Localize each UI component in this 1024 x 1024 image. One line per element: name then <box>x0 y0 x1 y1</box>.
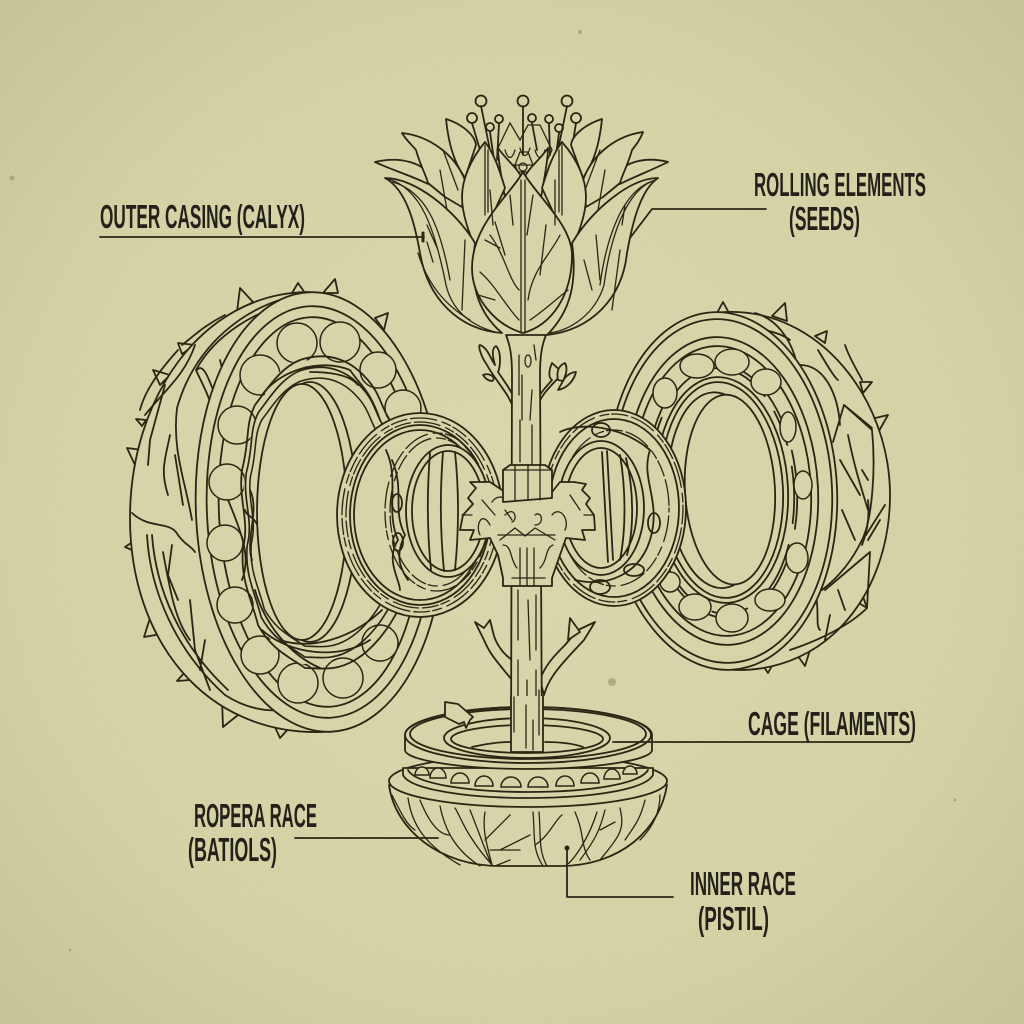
right ring back body <box>655 312 890 670</box>
upper branches <box>479 345 576 408</box>
left ring thorns <box>125 279 388 738</box>
stamens <box>467 96 581 160</box>
broken fragment <box>445 702 473 728</box>
left small bearing ring <box>337 413 503 617</box>
lower branches <box>475 618 595 695</box>
bowl veins <box>392 795 660 866</box>
left ring vine band <box>228 356 398 669</box>
right small ring details <box>545 414 683 602</box>
bowl <box>389 785 667 866</box>
left small ring body <box>337 413 503 617</box>
label: ropera race: (BATIOLS) <box>188 831 277 868</box>
label: ropera race <box>188 797 438 868</box>
label: ropera race: ROPERA RACE <box>194 797 317 834</box>
left ring rolling element balls <box>207 322 421 703</box>
cage ring lines <box>405 707 651 763</box>
gear body <box>460 482 595 586</box>
right ring rolling element balls <box>653 349 812 632</box>
right ring leaf veins <box>755 313 885 650</box>
label: outer casing: OUTER CASING (CALYX) <box>100 198 305 235</box>
stem shaft <box>506 335 546 752</box>
hexagonal collar <box>503 465 552 502</box>
caged ball row <box>415 766 637 787</box>
leader line: rolling elements <box>630 209 766 238</box>
left ring central opening <box>257 382 357 642</box>
lower race band <box>403 768 653 798</box>
left ring leaf veins <box>132 295 300 710</box>
outer petals <box>385 178 658 335</box>
flower crown <box>497 123 552 172</box>
stem grain in ring <box>514 690 539 750</box>
right ring thorns <box>717 302 888 673</box>
left small ring details <box>342 418 498 612</box>
left outer bearing ring <box>125 279 455 738</box>
label: inner race: INNER RACE <box>690 865 796 902</box>
gear surface lumps <box>462 495 594 585</box>
middle petals <box>462 142 586 247</box>
petal veins <box>388 145 655 333</box>
cage top ring <box>405 707 652 769</box>
collar facets <box>503 466 552 500</box>
base bearing <box>389 690 667 866</box>
label: inner race: (PISTIL) <box>698 900 769 937</box>
left ring back body <box>130 292 420 732</box>
leader line: cage <box>613 741 910 743</box>
leader line: outer casing <box>100 233 424 241</box>
right small bearing ring <box>542 410 686 606</box>
flower <box>375 96 668 335</box>
right outer bearing ring <box>598 302 890 676</box>
back petals <box>375 119 668 207</box>
center petal <box>472 172 572 333</box>
leader line: ropera race <box>295 837 438 839</box>
stem grain lines <box>518 345 536 745</box>
right small ring body <box>542 410 686 606</box>
right ring inner rims and opening <box>650 374 794 606</box>
label: rolling elements <box>630 166 926 238</box>
label: inner race <box>564 846 796 937</box>
stem <box>475 335 595 752</box>
right ring front face rims <box>598 306 846 676</box>
left ring front face rims <box>185 286 455 738</box>
label: rolling elements: (SEEDS) <box>789 200 860 237</box>
central gear hub <box>460 465 595 586</box>
flange <box>389 755 667 807</box>
leader line: inner race <box>564 846 673 897</box>
stem through ring <box>511 696 543 752</box>
lower race band lines <box>408 770 648 792</box>
right ring rolling element chain <box>640 360 804 622</box>
